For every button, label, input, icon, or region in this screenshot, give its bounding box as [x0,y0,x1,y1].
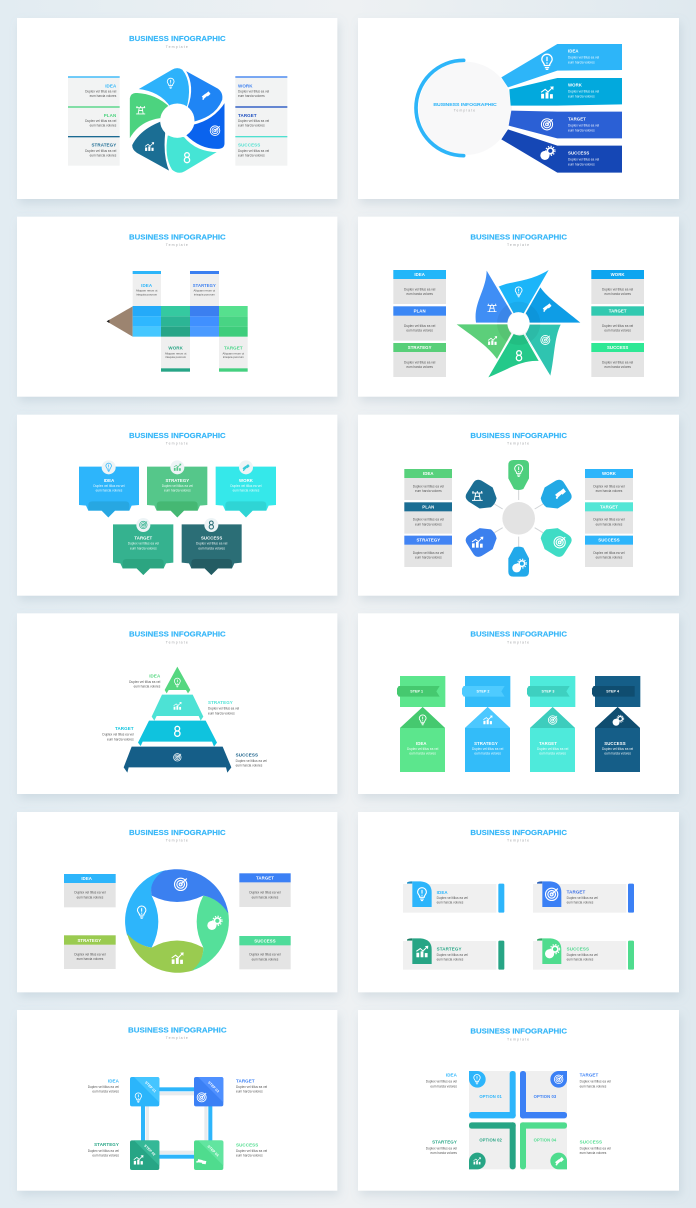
bar: idea [501,44,622,87]
title: BUSINESS INFOGRAPHIC [128,1027,227,1034]
left boxes: IDEA [414,272,426,277]
label: idea: Duplex vel tillus ea vel [129,680,161,684]
bar: work [509,78,622,106]
label: target: Duplex vel tillus ea vel [580,1080,611,1084]
panel background [17,613,337,794]
subtitle: Template [507,640,530,644]
card: work: Aliquam rerum ut [165,351,187,355]
bar: success: SUCCESS [568,151,589,156]
left boxes: PLAN [422,504,434,509]
card: idea: inisquia purorum [136,292,158,296]
card: startegy [403,938,504,970]
pyramid icons [174,678,182,761]
label: success: eum harcia volores [236,764,263,768]
quadrant: option 01: OPTION 01 [479,1094,503,1099]
card: success [182,518,242,575]
left boxes: eum harcia volores [406,365,433,369]
left boxes: Duplex vel tillus ea vel [404,324,436,328]
column: step 2: STEP 2 [477,690,489,694]
column: step 4: SUCCESS [604,741,626,746]
card: strategy: eum harcia volores [164,489,191,493]
subtitle: Template [166,442,189,446]
box: strategy: STRATEGY [77,938,101,943]
panel background [17,812,337,992]
left boxes: eum harcia volores [415,556,442,560]
card: success: Duplex vel tillus ea vel [196,542,228,546]
right boxes [585,469,633,567]
column: step 3: eum harcia volores [539,752,566,756]
label: success: eum harcia volores [236,1154,263,1158]
pinwheel blades [455,270,581,377]
panel: hexagon swirl [17,18,337,199]
label: idea: eum harcia volores [430,1084,457,1088]
label: target: TARGET [580,1073,599,1078]
title: BUSINESS INFOGRAPHIC [470,235,567,242]
label: idea [88,1078,120,1094]
right cards: eum harcia volores [238,94,265,98]
tile: step 02: STEP 02 [143,1144,156,1157]
left cards: Duplex vel tillus ea vel [85,119,117,123]
bar: work: eum harcia volores [568,95,595,99]
bar: work: WORK [568,83,583,88]
card: success: SUCCESS [567,947,589,952]
label: strategy: Duplex vel tillus ea vel [208,707,240,711]
quadrant: option 02 [469,1122,516,1169]
left boxes: Duplex vel tillus ea vel [413,551,444,555]
bar: work: Duplex vel tillus ea vel [568,90,600,94]
column: step 4: eum harcia volores [604,752,631,756]
card: work: inisquia purorum [165,355,187,359]
left cards: eum harcia volores [90,154,117,158]
right boxes: TARGET [609,309,627,314]
right boxes: eum harcia volores [596,556,623,560]
subtitle: Template [507,442,530,446]
card: work: Duplex vel tillus ea vel [230,484,262,488]
right cards: WORK [238,83,253,88]
quadrant: option 02: OPTION 02 [479,1138,503,1143]
subtitle: Template [166,640,189,644]
box: idea [64,874,116,907]
left boxes: Duplex vel tillus ea vel [404,287,436,291]
panel: circle with four bars [358,18,679,199]
right boxes: TARGET [600,504,618,509]
box: target: TARGET [256,875,274,880]
label: startegy [88,1142,119,1158]
pinwheel icons [487,287,552,361]
box: target [239,873,291,907]
card: target [533,881,634,913]
label: idea [129,673,161,689]
panel: four tab cards [358,812,679,992]
left boxes: Duplex vel tillus ea vel [413,484,444,488]
right boxes: eum harcia volores [604,292,631,296]
left cards: IDEA [105,83,117,88]
card: idea: IDEA [437,890,448,895]
column: step 4 [592,676,640,772]
left cards: Duplex vel tillus ea vel [85,89,117,93]
card: target: Duplex vel tillus ea vel [567,896,598,900]
label: idea: IDEA [149,673,161,678]
card: target: eum harcia volores [567,901,594,905]
blue arc [416,60,464,156]
panel: swirl circle [17,812,337,992]
card: idea [79,460,139,517]
label: target: eum harcia volores [236,1090,263,1094]
column: step 3: TARGET [539,741,557,746]
panel: four option quadrants [358,1010,679,1191]
card: work [216,460,276,517]
left cards [68,76,120,166]
bar: idea: eum harcia volores [568,61,595,65]
right cards: eum harcia volores [238,154,265,158]
card: target: TARGET [134,536,153,541]
card: startegy: inisquia purorum [194,292,215,296]
panel background [358,1010,679,1191]
tile: step 01 [130,1077,159,1106]
subtitle: Template [507,839,530,843]
box: target: eum harcia volores [252,895,279,899]
center title: BUSINESS INFOGRAPHIC [433,102,497,107]
column: step 2: eum harcia volores [474,752,501,756]
label: target: TARGET [115,726,134,731]
column: step 2: Duplex vel tillus ea vel [472,747,504,751]
radial petals [464,460,574,577]
label: idea [426,1073,458,1088]
bar: target [509,111,622,138]
right boxes [591,270,644,377]
label: idea: eum harcia volores [92,1090,119,1094]
center circle [502,502,535,535]
swirl icons [137,878,222,964]
subtitle: Template [166,45,189,49]
box: idea: eum harcia volores [77,895,104,899]
hexagon petals [129,68,225,173]
card: target [113,518,173,575]
left cards: eum harcia volores [90,124,117,128]
right boxes: eum harcia volores [604,365,631,369]
card: startegy [190,271,219,307]
right cards: TARGET [238,113,257,118]
left boxes [404,469,452,567]
right boxes: eum harcia volores [596,522,623,526]
card: strategy [147,460,207,517]
box: success: eum harcia volores [252,957,279,961]
label: success: Duplex vel tillus ea vel [236,759,267,763]
label: idea: Duplex vel tillus ea vel [88,1085,119,1089]
card: idea [133,271,161,307]
swirl segments [125,869,229,973]
bar: success: Duplex vel tillus ea vel [568,158,600,162]
label: startegy: Duplex vel tillus ea vel [426,1146,457,1150]
tile: step 03: STEP 03 [207,1080,220,1093]
card: target: Duplex vel tillus ea vel [128,542,159,546]
bar: target: TARGET [568,117,586,122]
right boxes: Duplex vel tillus ea vel [602,287,634,291]
hexagon icons [136,78,220,163]
label: strategy [208,700,240,715]
label: startegy: eum harcia volores [92,1154,119,1158]
box: success [239,936,291,969]
label: target [102,726,134,741]
bar: success [501,129,622,173]
tile: step 03 [194,1077,223,1106]
left boxes: IDEA [423,471,434,476]
right boxes: WORK [602,471,617,476]
square frame [143,1089,210,1157]
label: startegy: STARTEGY [432,1140,457,1145]
title: BUSINESS INFOGRAPHIC [470,433,567,440]
label: success: Duplex vel tillus ea vel [580,1146,611,1150]
box: success: SUCCESS [254,938,276,943]
column: step 2: STRATEGY [474,741,498,746]
quadrant: option 01 [469,1071,516,1118]
column: step 4: STEP 4 [606,690,620,694]
column: step 3 [527,676,575,772]
left boxes [393,270,446,377]
title: BUSINESS INFOGRAPHIC [129,632,226,639]
right boxes: Duplex vel tillus ea vel [602,360,634,364]
title: BUSINESS INFOGRAPHIC [470,830,567,837]
card: idea: Duplex vel tillus ea vel [437,896,468,900]
card: target [219,337,248,372]
card: target: Aliquam rerum ut [223,351,244,355]
card: idea [403,881,504,913]
label: startegy: STARTEGY [94,1142,119,1147]
tile: step 02 [130,1140,159,1170]
title: BUSINESS INFOGRAPHIC [470,632,567,639]
right boxes: Duplex vel tillus ea vel [593,518,625,522]
tile: step 01: STEP 01 [144,1080,157,1093]
card: work [161,337,190,372]
label: idea: eum harcia volores [134,685,161,689]
right boxes: eum harcia volores [596,489,623,493]
column: step 1 [397,676,445,772]
card: success: Duplex vel tillus ea vel [567,953,598,957]
card: startegy: eum harcia volores [437,958,464,962]
box: idea: IDEA [81,876,93,881]
label: target [236,1078,268,1094]
left boxes: PLAN [414,309,426,314]
left boxes: eum harcia volores [415,489,442,493]
label: startegy: eum harcia volores [430,1151,457,1155]
bar: target: eum harcia volores [568,129,595,133]
panel background [17,415,337,596]
column: step 1: STEP 1 [410,690,423,694]
column: step 2 [462,676,510,772]
card: idea: Duplex vel tillus ea vel [93,484,125,488]
right boxes: SUCCESS [607,345,628,350]
title: BUSINESS INFOGRAPHIC [470,1029,567,1036]
panel background [358,18,679,199]
left boxes: STRATEGY [408,345,432,350]
left cards: STRATEGY [91,143,116,148]
card: idea: IDEA [141,283,153,288]
label: success: Duplex vel tillus ea vel [236,1149,268,1153]
subtitle: Template [166,1036,189,1040]
right boxes: Duplex vel tillus ea vel [593,551,625,555]
card: idea: IDEA [104,478,115,483]
box: success: Duplex vel tillus ea vel [249,953,281,957]
right cards: Duplex vel tillus ea vel [238,89,270,93]
bar: idea: Duplex vel tillus ea vel [568,56,600,60]
column: step 1: Duplex vel tillus ea vel [407,747,439,751]
card: success: SUCCESS [201,536,222,541]
center subtitle: Template [454,109,476,113]
card: work: WORK [168,345,184,350]
column: step 1: eum harcia volores [409,752,436,756]
column: step 3: Duplex vel tillus ea vel [537,747,569,751]
title: BUSINESS INFOGRAPHIC [129,433,226,440]
panel background [17,18,337,199]
right boxes: Duplex vel tillus ea vel [593,484,625,488]
card: success: eum harcia volores [567,958,594,962]
bar: idea: IDEA [568,49,579,54]
label: success [236,752,267,768]
card: target: TARGET [224,345,243,350]
label: success: SUCCESS [580,1140,602,1145]
tile: step 04 [194,1140,223,1170]
label: success [236,1142,268,1158]
label: success: eum harcia volores [580,1151,607,1155]
label: target [580,1073,611,1088]
label: startegy: Duplex vel tillus ea vel [88,1149,119,1153]
label: target: TARGET [236,1078,255,1083]
left boxes: Duplex vel tillus ea vel [404,360,436,364]
panel background [358,812,679,992]
right cards: SUCCESS [238,143,260,148]
card: startegy: Aliquam rerum ut [194,289,215,293]
label: target: eum harcia volores [107,737,134,741]
petal icons [472,465,566,572]
panel: pencil [17,217,337,397]
right cards: Duplex vel tillus ea vel [238,149,270,153]
left boxes: eum harcia volores [406,329,433,333]
box: strategy: eum harcia volores [77,957,104,961]
title: BUSINESS INFOGRAPHIC [129,235,226,242]
label: strategy: STRATEGY [208,700,233,705]
right cards [235,76,287,166]
box: idea: Duplex vel tillus ea vel [74,891,106,895]
left boxes: STRATEGY [416,538,440,543]
column: step 4: Duplex vel tillus ea vel [602,747,634,751]
quadrant: option 04 [520,1122,567,1169]
label: success [580,1140,611,1155]
panel background [358,613,679,794]
subtitle: Template [166,839,189,843]
box: target: Duplex vel tillus ea vel [249,891,281,895]
left cards: PLAN [104,113,116,118]
subtitle: Template [507,243,530,247]
left boxes: eum harcia volores [415,522,442,526]
label: target: Duplex vel tillus ea vel [236,1085,268,1089]
right cards: Duplex vel tillus ea vel [238,119,270,123]
panel background [358,415,679,596]
quadrant: option 03 [520,1071,567,1118]
column: step 3: STEP 3 [542,690,554,694]
panel background [358,217,679,397]
panel: pinwheel [358,217,679,397]
right boxes: Duplex vel tillus ea vel [602,324,634,328]
card: startegy: STARTEGY [437,947,462,952]
card: work: WORK [239,478,254,483]
label: startegy [426,1140,457,1155]
title: BUSINESS INFOGRAPHIC [129,830,226,837]
left cards: Duplex vel tillus ea vel [85,149,117,153]
label: success: SUCCESS [236,1142,258,1147]
panel background [17,1010,337,1191]
subtitle: Template [166,243,189,247]
quadrant: option 03: OPTION 03 [534,1094,557,1099]
center circle [419,62,512,155]
panel: square loop [17,1010,337,1191]
connector lines [494,490,543,547]
pencil [107,306,248,337]
card: success: eum harcia volores [198,546,225,550]
right boxes: eum harcia volores [604,329,631,333]
right boxes: SUCCESS [598,538,620,543]
card: strategy: STRATEGY [165,478,189,483]
pyramid tiers [124,667,231,773]
subtitle: Template [507,1037,530,1041]
label: idea: Duplex vel tillus ea vel [426,1080,457,1084]
label: success: SUCCESS [236,752,258,757]
left boxes: eum harcia volores [406,292,433,296]
card: target: eum harcia volores [130,546,157,550]
panel: pyramid [17,613,337,794]
panel background [17,217,337,397]
card: idea: eum harcia volores [96,489,123,493]
left boxes: Duplex vel tillus ea vel [413,518,444,522]
label: target: eum harcia volores [580,1084,607,1088]
bar: target: Duplex vel tillus ea vel [568,124,600,128]
card: work: eum harcia volores [233,489,260,493]
card: strategy: Duplex vel tillus ea vel [162,484,193,488]
card: target: TARGET [567,890,586,895]
title: BUSINESS INFOGRAPHIC [129,36,226,43]
card: startegy: STARTEGY [193,283,216,288]
label: idea: IDEA [446,1073,458,1078]
box: strategy: Duplex vel tillus ea vel [74,952,106,956]
tile: step 04: STEP 04 [207,1144,220,1157]
label: strategy: eum harcia volores [208,711,235,715]
card: startegy: Duplex vel tillus ea vel [437,953,468,957]
box: strategy [64,935,116,969]
card: target: inisquia purorum [223,355,244,359]
right cards: eum harcia volores [238,124,265,128]
column: step 1: IDEA [416,741,427,746]
card: idea: eum harcia volores [437,901,464,905]
bar: success: eum harcia volores [568,163,595,167]
card: idea: Aliquam rerum ut [136,289,158,293]
panel: radial tags [358,415,679,596]
label: target: Duplex vel tillus ea vel [102,733,134,737]
panel: four step columns [358,613,679,794]
left cards: eum harcia volores [90,94,117,98]
label: idea: IDEA [108,1078,120,1083]
right boxes: WORK [611,272,625,277]
panel: five callout cards [17,415,337,596]
quadrant: option 04: OPTION 04 [534,1137,557,1142]
card: success [533,938,634,970]
